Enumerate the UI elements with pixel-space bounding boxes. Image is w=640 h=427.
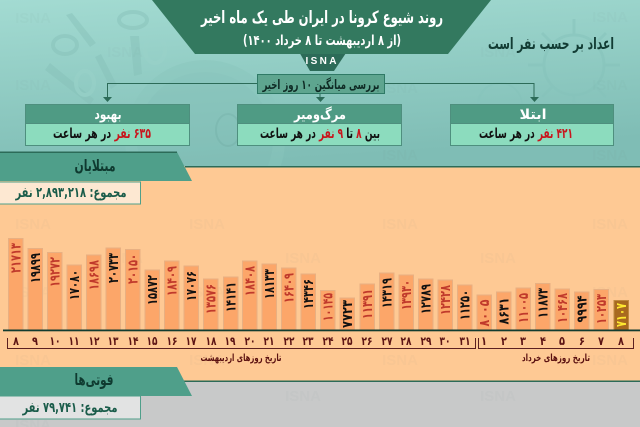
- bar 27 Ordibehesht: [380, 273, 396, 330]
- ISNA watermarks: ISNA: [382, 216, 418, 233]
- bar 30 Ordibehesht: ۱۲۴۲۸: [438, 285, 454, 315]
- ISNA tab: ISNA: [306, 56, 336, 67]
- panel: deaths: بین ۸ تا ۹ نفر در هر ساعت: [260, 126, 380, 142]
- bar 28 Ordibehesht: [399, 275, 415, 330]
- ISNA watermarks: ISNA: [592, 352, 628, 369]
- bar 16 Ordibehesht: ۱۸۴۰۹: [164, 266, 180, 296]
- ISNA watermarks: ISNA: [592, 147, 628, 164]
- bracket: Khordad: [478, 338, 634, 348]
- panel: infections: ۴۲۱ نفر در هر ساعت: [479, 126, 573, 142]
- ISNA watermarks: ISNA: [382, 352, 418, 369]
- ISNA tab: [298, 50, 348, 71]
- bar chart: infected per day: [8, 238, 630, 330]
- panel: recovery: [26, 104, 190, 146]
- 10-day average label: بررسی میانگین ۱۰ روز اخیر: [262, 77, 380, 93]
- date labels: ۱۳: [108, 334, 119, 348]
- date labels: ۱۴: [128, 334, 138, 348]
- ISNA watermarks: ISNA: [107, 44, 143, 61]
- ISNA watermarks: ISNA: [382, 147, 418, 164]
- date labels: ۸: [13, 334, 20, 348]
- date labels: ۱: [481, 334, 487, 348]
- panel: infections: ابتلا: [520, 107, 546, 123]
- ISNA watermarks: ISNA: [592, 77, 628, 94]
- ISNA watermarks: ISNA: [189, 284, 225, 301]
- bar 9 Ordibehesht: ۱۹۸۹۹: [28, 253, 44, 283]
- date labels: ۱۶: [166, 334, 178, 348]
- bar 11 Ordibehesht: ۱۷۰۸۰: [67, 270, 83, 300]
- bar 8 Ordibehesht: ۲۱۷۱۳: [8, 243, 24, 273]
- ISNA watermarks: ISNA: [480, 388, 516, 405]
- bar 12 Ordibehesht: ۱۸۶۹۸: [86, 260, 102, 290]
- ISNA watermarks: ISNA: [107, 387, 143, 404]
- bar 21 Ordibehesht: ۱۸۱۳۳: [262, 269, 278, 299]
- bar 13 Ordibehesht: [106, 248, 122, 330]
- date labels: ۹: [32, 334, 39, 348]
- bar 14 Ordibehesht: [126, 250, 142, 330]
- bar 19 Ordibehesht: ۱۴۱۴۱: [224, 282, 240, 312]
- bar 15 Ordibehesht: ۱۵۸۷۲: [145, 275, 161, 305]
- ISNA watermarks: ISNA: [107, 250, 143, 267]
- section band: deaths: فوتی‌ها: [74, 370, 114, 389]
- background: small virus illustration: [478, 19, 620, 127]
- bar 24 Ordibehesht: [320, 290, 336, 330]
- date labels: ۲۴: [322, 334, 334, 348]
- background: peach chart area: [0, 166, 640, 381]
- bar 21 Ordibehesht: [262, 264, 278, 330]
- bar 15 Ordibehesht: [145, 270, 161, 330]
- panel: recovery: بهبود: [94, 107, 122, 123]
- bar 6 Khordad: ۹۹۹۴: [574, 295, 590, 322]
- date labels: ۱۷: [186, 334, 197, 348]
- date labels: ۳۰: [440, 334, 450, 348]
- bar 3 Khordad: [516, 288, 532, 330]
- ISNA watermarks: ISNA: [382, 80, 418, 97]
- bar 18 Ordibehesht: ۱۳۵۷۶: [204, 284, 220, 314]
- ISNA watermarks: ISNA: [480, 44, 516, 61]
- ISNA watermarks: ISNA: [15, 216, 51, 233]
- bar 29 Ordibehesht: ۱۲۷۸۹: [418, 284, 434, 314]
- bar 29 Ordibehesht: [418, 279, 434, 330]
- date labels: ۷: [598, 334, 605, 348]
- date labels: ۱۰: [50, 334, 60, 348]
- bar 13 Ordibehesht: ۲۰۷۳۳: [106, 253, 122, 283]
- bracket: Ordibehesht: [8, 338, 476, 348]
- date labels: ۲۹: [420, 334, 432, 348]
- bar 8 Ordibehesht: [8, 238, 24, 330]
- bar 26 Ordibehesht: [360, 284, 376, 330]
- background: large virus illustration: [45, 12, 285, 220]
- bar 31 Ordibehesht: ۱۱۲۵۰: [458, 290, 474, 320]
- bar 3 Khordad: ۱۱۰۰۵: [516, 293, 532, 323]
- section band: infected: [0, 152, 640, 181]
- bar 2 Khordad: ۸۶۳۱: [496, 298, 512, 324]
- date labels: ۵: [559, 334, 565, 348]
- date labels: ۱۲: [88, 334, 100, 348]
- date labels: ۲۶: [362, 334, 372, 348]
- deaths total: [0, 396, 140, 419]
- date labels: ۳۱: [460, 334, 470, 348]
- date labels: ۲۵: [342, 334, 352, 348]
- date labels: ۲۱: [264, 334, 274, 348]
- ISNA watermarks: ISNA: [592, 9, 628, 26]
- bar 17 Ordibehesht: [184, 266, 200, 330]
- date labels: ۱۹: [224, 334, 236, 348]
- panel: infections: [450, 104, 614, 146]
- bar 23 Ordibehesht: [301, 274, 317, 330]
- date labels: ۲۷: [382, 334, 393, 348]
- bar 11 Ordibehesht: [67, 265, 83, 330]
- bar 10 Ordibehesht: [48, 252, 64, 330]
- date labels: ۱۸: [206, 334, 217, 348]
- chart axis line: [3, 330, 640, 331]
- ISNA watermarks: ISNA: [189, 216, 225, 233]
- panel: deaths: مرگ‌ومیر: [293, 106, 346, 123]
- ISNA watermarks: ISNA: [15, 10, 51, 27]
- header banner: [152, 0, 491, 71]
- bar 27 Ordibehesht: ۱۴۳۱۹: [380, 278, 396, 308]
- section band: deaths: [0, 367, 640, 396]
- bar 9 Ordibehesht: [28, 248, 44, 330]
- bar 10 Ordibehesht: ۱۹۲۷۲: [48, 257, 64, 287]
- date labels: ۳: [520, 334, 527, 348]
- date labels: ۲۰: [244, 334, 256, 348]
- date labels: ۶: [579, 334, 585, 348]
- bar 30 Ordibehesht: [438, 280, 454, 330]
- bar 5 Khordad: ۱۰۴۶۸: [555, 293, 571, 323]
- subtitle: (از ۸ اردیبهشت تا ۸ خرداد ۱۴۰۰): [243, 33, 401, 49]
- bar 22 Ordibehesht: [282, 268, 298, 330]
- panel: deaths: [238, 104, 402, 146]
- ISNA watermarks: ISNA: [285, 250, 321, 267]
- bar 5 Khordad: [555, 289, 571, 330]
- bar 28 Ordibehesht: ۱۳۹۳۰: [399, 280, 415, 310]
- ISNA watermarks: ISNA: [189, 352, 225, 369]
- infected total: مجموع: ۲,۸۹۳,۲۱۸ نفر: [15, 185, 127, 201]
- deaths total: مجموع: ۷۹,۷۴۱ نفر: [22, 400, 118, 416]
- date labels: ۱۱: [68, 334, 80, 348]
- title: روند شیوع کرونا در ایران طی یک ماه اخیر: [200, 8, 443, 28]
- date labels: ۴: [540, 334, 546, 348]
- 10-day average label: [258, 74, 384, 94]
- ISNA watermarks: ISNA: [592, 284, 628, 301]
- ISNA watermarks: ISNA: [15, 352, 51, 369]
- ISNA watermarks: ISNA: [15, 284, 51, 301]
- bar 23 Ordibehesht: ۱۴۳۴۶: [301, 279, 317, 309]
- bar 7 Khordad: ۱۰۲۵۳: [594, 294, 610, 324]
- bar 17 Ordibehesht: ۱۷۰۷۶: [184, 271, 200, 301]
- section band: infected: مبتلایان: [74, 156, 116, 175]
- bar 18 Ordibehesht: [204, 279, 220, 330]
- panel: recovery: ۶۳۵ نفر در هر ساعت: [53, 126, 151, 142]
- date labels: ۱۵: [146, 334, 158, 348]
- ISNA watermarks: ISNA: [592, 216, 628, 233]
- bar 25 Ordibehesht: ۷۷۲۳: [340, 300, 356, 328]
- bar 4 Khordad: ۱۱۸۷۳: [536, 288, 552, 318]
- bar 22 Ordibehesht: ۱۶۴۰۹: [282, 273, 298, 303]
- connector arrows: [103, 83, 539, 102]
- ISNA watermarks: ISNA: [285, 388, 321, 405]
- date labels: ۲۸: [400, 334, 412, 348]
- ISNA watermarks: ISNA: [285, 114, 321, 131]
- axis caption: Ordibehesht: تاریخ روزهای اردیبهشت: [200, 353, 282, 364]
- bar 26 Ordibehesht: ۱۱۳۹۱: [360, 289, 376, 319]
- date labels: ۲۳: [302, 334, 314, 348]
- ISNA watermarks: ISNA: [480, 250, 516, 267]
- bar 1 Khordad: ۸۰۰۵: [477, 299, 493, 326]
- bar 14 Ordibehesht: ۲۰۱۵۰: [126, 254, 142, 284]
- date labels: ۲: [501, 334, 508, 348]
- background: teal top area: [0, 0, 640, 168]
- bar 8 Khordad highlighted: ۷۱۰۷: [614, 303, 630, 327]
- bar 19 Ordibehesht: [224, 277, 240, 330]
- date labels: ۲۲: [284, 334, 295, 348]
- infected total: [0, 182, 140, 204]
- bar 16 Ordibehesht: [164, 261, 180, 330]
- ISNA watermarks: ISNA: [15, 77, 51, 94]
- bar 24 Ordibehesht: ۱۰۱۴۵: [320, 293, 336, 321]
- banner shape: [152, 0, 491, 54]
- date labels: [13, 334, 625, 348]
- bar 31 Ordibehesht: [458, 285, 474, 330]
- bar 12 Ordibehesht: [86, 255, 102, 330]
- bar 20 Ordibehesht: [242, 261, 258, 330]
- axis caption: Khordad: تاریخ روزهای خرداد: [522, 353, 590, 364]
- background: gray lower area: [0, 381, 640, 427]
- date labels: ۸: [618, 334, 625, 348]
- bar 20 Ordibehesht: ۱۸۴۰۸: [242, 266, 258, 296]
- bar 4 Khordad: [536, 284, 552, 330]
